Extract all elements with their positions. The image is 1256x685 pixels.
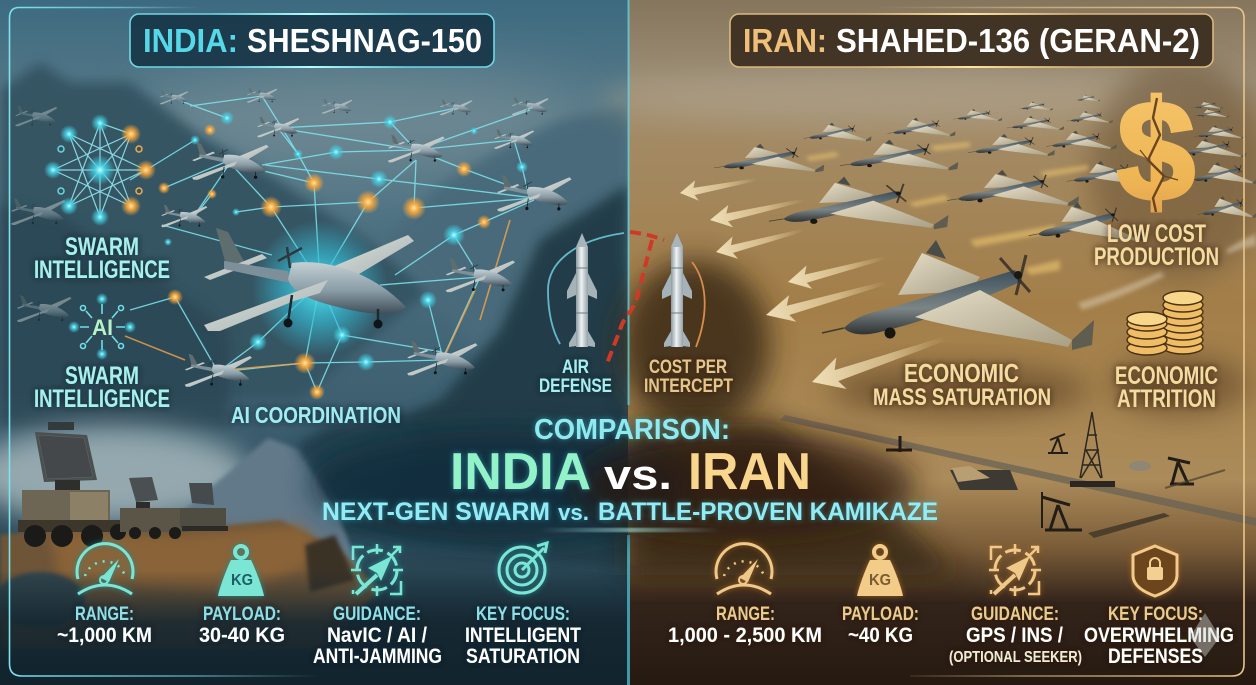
subtitle: NEXT-GEN SWARM: [322, 498, 550, 526]
stat: Iran key focus: [1084, 546, 1234, 668]
icon: weight: KG: [869, 572, 891, 589]
label: economic mass saturation: MASS SATURATION: [873, 384, 1051, 411]
heading: India vs. Iran: IRAN: [688, 443, 811, 501]
label: swarm intelligence: INTELLIGENCE: [34, 256, 170, 284]
radar truck 1: [18, 422, 130, 547]
label: cost per intercept: COST PER: [649, 357, 727, 378]
label: economic attrition: ECONOMIC: [1115, 362, 1218, 390]
stat: India guidance: [313, 544, 442, 668]
stat: India guidance: NavIC / AI /: [327, 624, 427, 647]
label: swarm intelligence, second: SWARM: [65, 362, 139, 390]
stat: Iran range: 1,000 - 2,500 KM: [668, 624, 822, 647]
icon: AI chip: [68, 293, 136, 360]
frame: India panel: [10, 8, 320, 676]
title: India: INDIA:: [143, 22, 238, 59]
heading: India vs. Iran: vs.: [604, 451, 672, 498]
title: India: [130, 13, 494, 68]
stat: India payload: 30-40 KG: [199, 624, 285, 647]
label: swarm intelligence, second: INTELLIGENCE: [34, 385, 170, 413]
drone swarm: Shahed-136 formation: [714, 95, 1256, 350]
red dashed intercept line: [606, 232, 664, 366]
icon: navigation: [351, 544, 403, 596]
icon: AI chip: AI: [92, 315, 113, 340]
main drone: Sheshnag-150: [204, 228, 414, 331]
frame: Iran panel: [880, 8, 1244, 676]
stat: Iran key focus: DEFENSES: [1108, 645, 1203, 668]
subtitle: [322, 498, 938, 526]
title: Iran: IRAN:: [743, 22, 827, 59]
stat: Iran key focus: OVERWHELMING: [1084, 624, 1234, 647]
stat: India range: RANGE:: [75, 604, 134, 625]
icon: gauge: [77, 544, 133, 594]
stat: India payload: PAYLOAD:: [203, 604, 281, 625]
radar truck 2: [120, 477, 188, 539]
stat: India guidance: ANTI-JAMMING: [313, 645, 442, 668]
icon: weight: KG: [231, 572, 253, 589]
oil derrick: [1070, 412, 1115, 484]
stat: India payload: [199, 546, 285, 647]
label: cost per intercept: [644, 357, 733, 397]
stat: India guidance: GUIDANCE:: [333, 604, 421, 625]
pumpjack: [886, 434, 1194, 530]
label: swarm intelligence: SWARM: [65, 233, 139, 261]
icon: air defense missile: [548, 233, 624, 347]
icon: swarm network: [44, 114, 156, 226]
label: economic mass saturation: ECONOMIC: [904, 358, 1019, 388]
watermark sparkle: [1190, 613, 1220, 657]
title: Iran: SHAHED-136 (GERAN-2): [836, 22, 1200, 59]
stat: Iran range: RANGE:: [716, 604, 775, 625]
label: economic attrition: ATTRITION: [1117, 385, 1216, 413]
label: air defense: AIR: [562, 357, 589, 378]
icon: navigation: [989, 544, 1041, 596]
stat: India key focus: [465, 543, 581, 668]
label: swarm intelligence: [34, 233, 170, 284]
panel: India background scene: [0, 0, 628, 685]
title: Iran: [730, 13, 1213, 68]
icon: radar trucks: [18, 422, 228, 547]
stat: Iran guidance: GPS / INS /: [966, 624, 1063, 647]
stat: India key focus: INTELLIGENT: [465, 624, 581, 647]
network: swarm links and nodes: [125, 96, 534, 400]
stat: Iran key focus: KEY FOCUS:: [1108, 604, 1203, 625]
label: AI coordination: AI COORDINATION: [231, 402, 401, 428]
label: air defense: [539, 357, 612, 397]
drone swarm: Sheshnag escorts: [11, 88, 572, 387]
stat: India key focus: KEY FOCUS:: [476, 604, 570, 625]
arrows: motion arrows of Iranian drones: [678, 170, 951, 399]
label: air defense: DEFENSE: [539, 376, 612, 397]
main drone: Shahed-136: [822, 240, 1094, 350]
label: low cost production: LOW COST: [1107, 220, 1206, 248]
icon: interceptor missile: [662, 233, 705, 347]
radar truck 3: [180, 483, 228, 531]
icon: shield with lock: [1133, 546, 1177, 596]
stat: Iran range: [668, 544, 822, 647]
stat: India range: [57, 544, 152, 647]
icon: target: [499, 543, 547, 593]
heading: India vs. Iran: INDIA: [450, 443, 591, 501]
panel: Iran background scene: [600, 0, 1256, 685]
streak: engine glow: [805, 142, 1088, 275]
stat: Iran guidance: (OPTIONAL SEEKER): [949, 649, 1082, 666]
label: cost per intercept: INTERCEPT: [644, 376, 733, 397]
label: swarm intelligence, second: [34, 362, 170, 413]
icon: gauge: [716, 544, 772, 594]
smoke trail: [1078, 234, 1256, 310]
subtitle: vs.: [558, 500, 589, 525]
icon: cracked dollar: $: [1117, 72, 1195, 231]
stat: Iran payload: PAYLOAD:: [842, 604, 919, 625]
stat: India range: ~1,000 KM: [57, 624, 152, 647]
heading: comparison: [322, 414, 938, 532]
oil field scene: [780, 412, 1256, 538]
title: India: SHESHNAG-150: [247, 22, 482, 59]
stat: Iran payload: [842, 546, 919, 647]
stat: Iran payload: ~40 KG: [848, 624, 913, 647]
label: economic attrition: [1115, 362, 1218, 413]
stat: India key focus: SATURATION: [466, 645, 580, 668]
subtitle: BATTLE-PROVEN KAMIKAZE: [598, 498, 938, 526]
central dark halo: [310, 430, 915, 540]
label: economic mass saturation: [873, 358, 1051, 411]
stat: Iran guidance: GUIDANCE:: [971, 604, 1059, 625]
panel divider: [627, 0, 630, 685]
stat: Iran guidance: [949, 544, 1082, 666]
icon: coin stacks: [1127, 291, 1203, 355]
label: low cost production: [1094, 220, 1219, 271]
heading: India vs. Iran: [450, 443, 811, 501]
heading: comparison: COMPARISON:: [534, 414, 730, 446]
